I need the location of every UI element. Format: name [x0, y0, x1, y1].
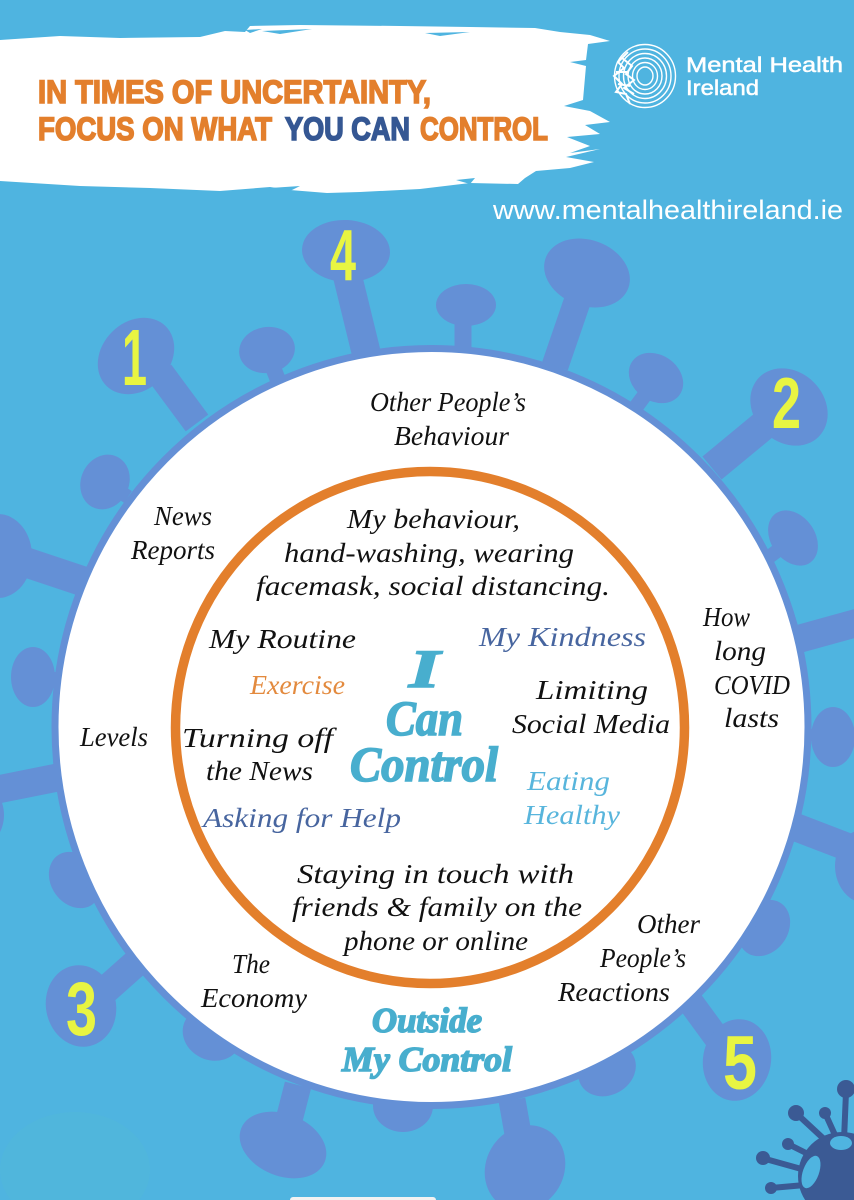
inside my control items: My Kindness — [478, 622, 646, 652]
spike big right upper — [795, 622, 854, 640]
numbers on spikes: 3 — [66, 967, 97, 1052]
spike small lower right — [727, 890, 801, 966]
inside my control items: Turning off — [182, 723, 337, 753]
title: IN TIMES OF UNCERTAINTY, — [38, 74, 431, 110]
inside my control items: Healthy — [523, 800, 620, 830]
inside my control items: My behaviour, — [346, 504, 520, 534]
outside my control items: Reports — [130, 535, 215, 565]
outside my control items: Reactions — [557, 977, 670, 1007]
outside my control items: People’s — [599, 943, 686, 973]
spike small left lower — [38, 842, 112, 918]
spike 5 — [678, 985, 778, 1106]
heading: I can control: Can — [386, 690, 463, 746]
numbers on spikes — [66, 216, 801, 1106]
outside my control items: How — [702, 602, 750, 632]
spike 4 — [300, 218, 392, 352]
heading: I can control — [350, 639, 498, 792]
spike bottom small — [373, 1080, 433, 1132]
bottom tab — [290, 1197, 436, 1200]
inside my control items: friends & family on the — [292, 892, 582, 922]
spike big right lower — [790, 825, 854, 904]
spike small left upper — [71, 446, 139, 518]
numbers on spikes: 1 — [122, 313, 147, 402]
outside my control items: The — [232, 949, 270, 979]
outside my control items: COVID — [714, 670, 790, 700]
inside my control items: hand-washing, wearing — [284, 538, 574, 568]
inside my control items: Asking for Help — [201, 803, 401, 833]
spike 3 — [38, 955, 145, 1053]
spike small bottom left — [174, 998, 250, 1070]
outside my control items — [79, 387, 790, 1013]
title: CONTROL — [420, 111, 548, 147]
inside my control items — [182, 504, 670, 956]
heading: I can control: I — [408, 639, 443, 699]
spike bottom right — [469, 1100, 581, 1200]
icon: concentric rings — [614, 44, 676, 108]
numbers on spikes: 2 — [772, 364, 801, 444]
outside my control items: lasts — [724, 703, 779, 733]
outside my control items: Other — [637, 909, 700, 939]
inside my control items: phone or online — [342, 926, 528, 956]
spike small right upper — [758, 501, 828, 575]
heading: outside my control: My Control — [341, 1040, 512, 1079]
outside my control items: Other People’s — [370, 387, 526, 417]
icon: small dark virus — [756, 1080, 854, 1200]
heading: outside my control: Outside — [372, 1001, 482, 1040]
inside my control items: Staying in touch with — [297, 859, 574, 889]
spike small right — [805, 707, 854, 767]
spike bottom left — [230, 1085, 336, 1191]
inside my control items: facemask, social distancing. — [256, 571, 610, 601]
logo text — [686, 54, 843, 100]
spike small upper left — [235, 322, 299, 385]
logo text: Ireland — [686, 77, 759, 100]
numbers on spikes: 4 — [330, 216, 356, 296]
title — [38, 74, 548, 147]
outside my control items: Levels — [79, 722, 148, 752]
panel: outer circle, outside my control — [55, 348, 808, 1106]
numbers on spikes: 5 — [723, 1021, 757, 1106]
inside my control items: Exercise — [249, 670, 345, 700]
outside my control items: Economy — [200, 983, 307, 1013]
spike small left — [11, 647, 60, 707]
outside my control items: long — [714, 636, 766, 666]
spike small top right — [619, 343, 693, 415]
outside my control items: News — [153, 501, 212, 531]
spike small top — [436, 284, 496, 350]
title: FOCUS ON WHAT — [38, 111, 272, 147]
inside my control items: the News — [206, 756, 313, 786]
spike 2 — [712, 353, 843, 468]
inside my control items: My Routine — [208, 624, 356, 654]
logo: Mental Health Ireland — [614, 44, 843, 108]
spike 1 — [82, 302, 197, 423]
heading: I can control: Control — [350, 736, 498, 792]
inside my control items: Limiting — [535, 675, 648, 705]
header brush stroke — [0, 25, 610, 193]
spike big left lower — [0, 777, 60, 847]
inside my control items: Eating — [526, 766, 610, 796]
website url: www.mentalhealthireland.ie — [492, 195, 843, 225]
spike small bottom right — [569, 1033, 645, 1107]
spike big top right — [534, 227, 640, 366]
faint virus watermark — [0, 1112, 150, 1200]
inside my control items: Social Media — [512, 709, 670, 739]
ring: I can control — [176, 472, 684, 984]
logo text: Mental Health — [686, 54, 843, 77]
heading: outside my control — [341, 1001, 512, 1079]
spike big left — [0, 514, 85, 598]
outside my control items: Behaviour — [394, 421, 509, 451]
title: YOU CAN — [285, 111, 410, 147]
